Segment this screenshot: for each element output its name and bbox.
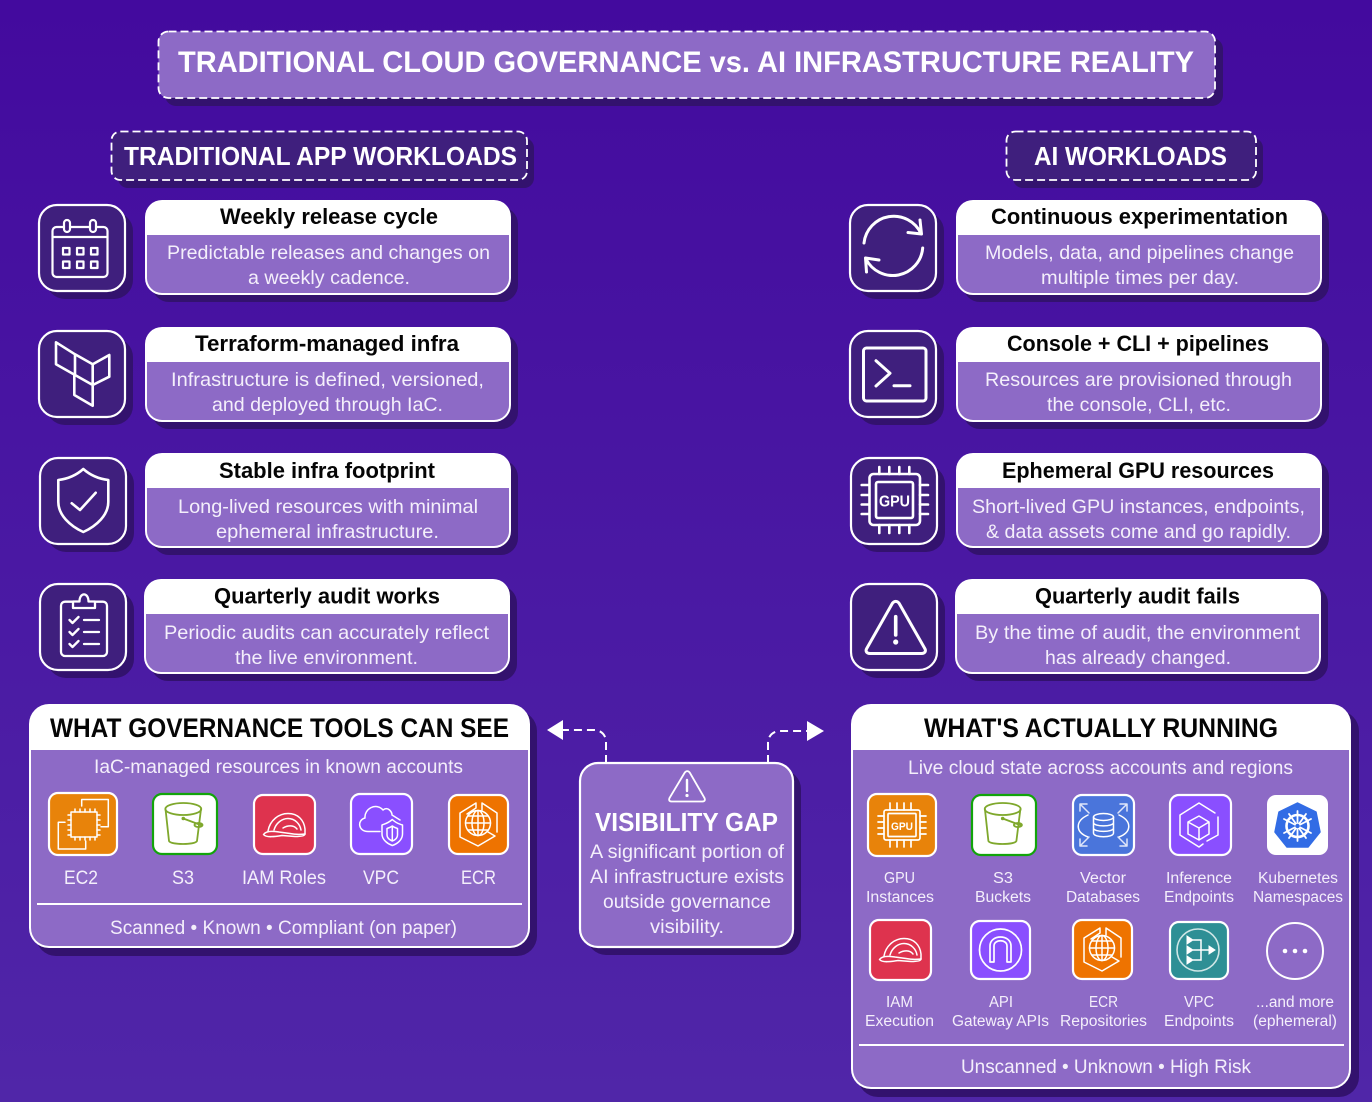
card: quarterly audit fails: By the time of audit, the environment (975, 622, 1301, 644)
card: console + cli + pipelines: the console, CLI, etc. (1047, 394, 1231, 416)
icon: warning triangle (851, 584, 945, 678)
card: weekly release cycle: a weekly cadence. (248, 267, 410, 289)
card: stable infra footprint: Stable infra footprint (219, 458, 436, 483)
label: vector databases: Vector (1080, 870, 1126, 887)
arrow: to running workloads (768, 721, 824, 763)
icon: s3 buckets (972, 795, 1036, 855)
icon: sync arrows (850, 205, 944, 299)
icon: clipboard checklist (40, 584, 134, 678)
icon: vpc (351, 794, 412, 854)
icon: calendar (39, 205, 133, 299)
card: stable infra footprint: Long-lived resources with minimal (178, 496, 478, 518)
heading: visibility gap: VISIBILITY GAP (595, 807, 778, 837)
label: gpu instances (866, 870, 934, 906)
label: s3 buckets: Buckets (975, 889, 1031, 906)
card: console + cli + pipelines: Resources are provisioned through (985, 369, 1292, 391)
card: quarterly audit works: the live environment. (235, 647, 418, 669)
icon: kubernetes (1267, 795, 1328, 855)
label: vpc endpoints: Endpoints (1164, 1013, 1234, 1030)
card: continuous experimentation: Models, data, and pipelines change (985, 242, 1294, 264)
heading: governance tools: WHAT GOVERNANCE TOOLS CAN SEE (50, 713, 509, 743)
label: and more: (ephemeral) (1253, 1013, 1337, 1030)
icon: ecr (449, 795, 508, 854)
panel: what's actually running (851, 704, 1359, 1097)
text: visibility gap description: A significant portion of (590, 842, 785, 863)
icon: ecr repositories (1073, 920, 1132, 979)
card: terraform-managed infra: Terraform-managed infra (195, 331, 460, 356)
icon: more dots (1267, 923, 1323, 979)
label: api gateway (952, 994, 1049, 1030)
label: vpc endpoints (1164, 994, 1234, 1030)
label: s3 buckets (975, 870, 1031, 906)
label: vpc endpoints: VPC (1184, 994, 1214, 1011)
card: quarterly audit fails: Quarterly audit fails (1035, 584, 1240, 608)
icon: small warning (669, 771, 705, 802)
label: iam execution: IAM (886, 994, 913, 1011)
label: inference endpoints: Endpoints (1164, 889, 1234, 906)
title (158, 32, 1223, 106)
label: api gateway: Gateway APIs (952, 1013, 1049, 1030)
card: quarterly audit works: Quarterly audit works (214, 584, 440, 608)
card: ephemeral gpu resources (956, 453, 1329, 555)
icon: gpu chip: GPU (879, 494, 910, 510)
card: weekly release cycle: Weekly release cycle (220, 204, 438, 229)
card: quarterly audit works (144, 579, 517, 681)
heading: traditional app workloads (112, 132, 534, 188)
label: s3 buckets: S3 (993, 870, 1013, 887)
text: visibility gap description (590, 842, 785, 938)
card: continuous experimentation: Continuous experimentation (991, 204, 1288, 229)
label: kubernetes namespaces: Namespaces (1253, 889, 1343, 906)
label: iam roles: IAM Roles (242, 868, 326, 889)
label: kubernetes namespaces (1253, 870, 1343, 906)
label: vector databases (1066, 870, 1140, 906)
icon: s3 (153, 794, 217, 854)
icon: iam roles (254, 795, 315, 854)
icon: inference endpoints (1170, 795, 1231, 855)
icon: terminal (850, 331, 944, 425)
label: ecr repositories (1060, 994, 1147, 1030)
label: ecr repositories: ECR (1089, 994, 1118, 1011)
icon: gpu instances (868, 794, 936, 856)
label: s3: S3 (172, 868, 194, 889)
icon: vector databases (1073, 795, 1134, 855)
label: gpu instances: GPU (884, 870, 915, 887)
label: and more (1253, 994, 1337, 1030)
card: stable infra footprint (145, 453, 518, 555)
footer: scanned known compliant: Scanned • Known • Compliant (on paper) (110, 918, 457, 939)
card: ephemeral gpu resources: Ephemeral GPU resources (1002, 458, 1274, 483)
arrow: to governance tools (547, 720, 606, 763)
icon: vpc endpoints (1170, 922, 1228, 979)
label: iam execution: Execution (865, 1013, 934, 1030)
label: inference endpoints: Inference (1166, 870, 1232, 887)
card: quarterly audit works: Periodic audits can accurately reflect (164, 622, 490, 644)
label: ec2: EC2 (64, 868, 98, 889)
card: continuous experimentation (956, 200, 1329, 302)
card: ephemeral gpu resources: & data assets come and go rapidly. (986, 521, 1291, 543)
title: TRADITIONAL CLOUD GOVERNANCE vs. AI INFRASTRUCTURE REALITY (178, 46, 1194, 79)
label: iam execution (865, 994, 934, 1030)
card: weekly release cycle: Predictable releases and changes on (167, 242, 490, 264)
label: inference endpoints (1164, 870, 1234, 906)
label: kubernetes namespaces: Kubernetes (1258, 870, 1338, 887)
card: quarterly audit fails (955, 579, 1328, 681)
text: visibility gap description: visibility. (650, 917, 724, 938)
heading: traditional app workloads: TRADITIONAL APP WORKLOADS (124, 141, 517, 171)
heading: ai workloads (1006, 132, 1263, 188)
icon: api gateway (971, 921, 1030, 979)
label: api gateway: API (989, 994, 1013, 1011)
card: weekly release cycle (145, 200, 518, 302)
subtitle: governance tools: IaC-managed resources in known accounts (94, 757, 463, 778)
panel: what governance tools can see (29, 704, 537, 956)
subtitle: actually running: Live cloud state across accounts and regions (908, 758, 1293, 779)
text: visibility gap description: AI infrastructure exists (590, 867, 784, 888)
icon: terraform (39, 331, 133, 425)
card: continuous experimentation: multiple times per day. (1041, 267, 1239, 289)
label: and more: ...and more (1256, 994, 1334, 1011)
card: quarterly audit fails: has already changed. (1045, 647, 1231, 669)
card: terraform-managed infra: Infrastructure is defined, versioned, (171, 369, 484, 391)
label: vector databases: Databases (1066, 889, 1140, 906)
card: terraform-managed infra: and deployed through IaC. (212, 394, 443, 416)
label: vpc: VPC (363, 868, 399, 889)
text: visibility gap description: outside governance (603, 892, 771, 913)
icon: gpu chip (851, 458, 945, 552)
card: console + cli + pipelines: Console + CLI + pipelines (1007, 331, 1269, 356)
card: stable infra footprint: ephemeral infrastructure. (216, 521, 439, 543)
icon: iam execution (870, 920, 931, 980)
label: ecr repositories: Repositories (1060, 1013, 1147, 1030)
card: terraform-managed infra (145, 327, 518, 429)
heading: ai workloads: AI WORKLOADS (1034, 141, 1227, 171)
icon: ec2 (49, 793, 117, 855)
icon: shield (40, 458, 134, 552)
card: console + cli + pipelines (956, 327, 1329, 429)
label: gpu instances: Instances (866, 889, 934, 906)
footer: unscanned unknown high risk: Unscanned • Unknown • High Risk (961, 1057, 1251, 1078)
icon: gpu instances: GPU (891, 821, 913, 833)
label: ecr: ECR (461, 868, 496, 889)
card: ephemeral gpu resources: Short-lived GPU instances, endpoints, (972, 496, 1305, 518)
callout: visibility gap (580, 763, 801, 955)
heading: actually running: WHAT'S ACTUALLY RUNNING (924, 713, 1278, 743)
